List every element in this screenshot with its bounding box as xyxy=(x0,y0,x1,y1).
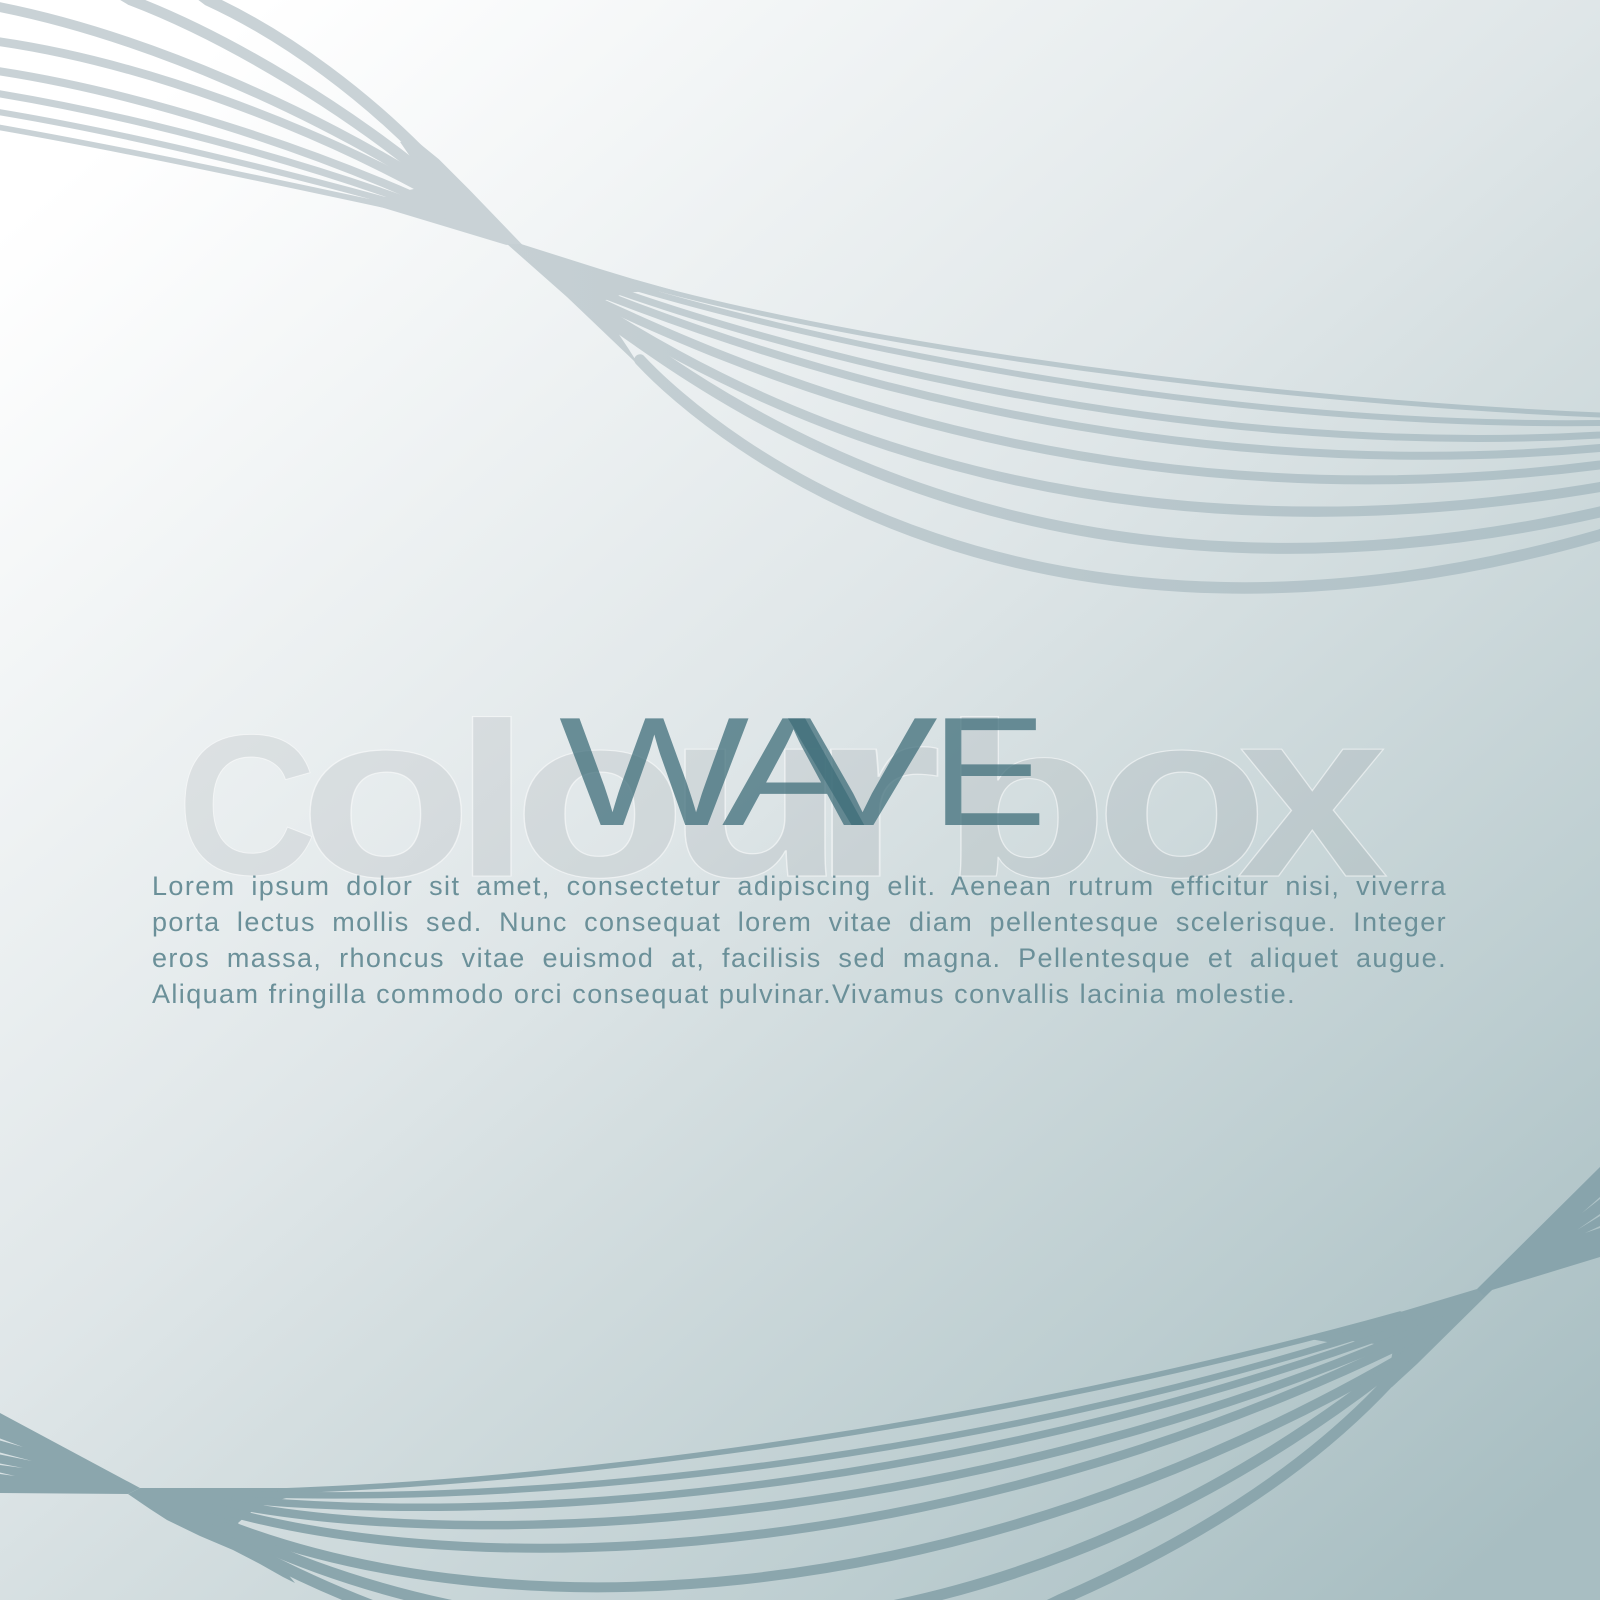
watermark: Colour box: l xyxy=(453,678,531,923)
top wave xyxy=(0,0,1600,588)
body paragraph: eros massa, rhoncus vitae euismod at, facilisis sed magna. Pellentesque et aliquet augue. xyxy=(152,943,1447,973)
watermark: Colour box xyxy=(177,659,1390,928)
watermark: Colour box: u xyxy=(667,659,845,927)
watermark: Colour box: o xyxy=(1095,665,1268,926)
body paragraph: porta lectus mollis sed. Nunc consequat lorem vitae diam pellentesque scelerisque. Integer xyxy=(152,907,1447,937)
watermark: Colour box: o xyxy=(299,665,472,926)
top wave: left strand bundle xyxy=(0,0,522,245)
title: WAVE xyxy=(559,685,1047,859)
title: WAVE: W xyxy=(559,685,750,859)
watermark: Colour box: C xyxy=(177,693,317,917)
top wave: right strand bundle xyxy=(507,244,1600,588)
watermark: Colour box: b xyxy=(942,678,1108,923)
bottom wave: main strand bundle xyxy=(128,1289,1492,1600)
title: WAVE: V xyxy=(787,685,938,859)
body paragraph: Aliquam fringilla commodo orci consequat pulvinar.Vivamus convallis lacinia molestie. xyxy=(152,979,1296,1009)
body paragraph: Lorem ipsum dolor sit amet, consectetur adipiscing elit. Aenean rutrum efficitur nisi, viverra xyxy=(152,871,1447,901)
title: WAVE: A xyxy=(722,685,865,858)
bottom wave: right corner fan xyxy=(1477,1167,1600,1296)
bottom wave: left corner fan xyxy=(0,1413,140,1494)
watermark: Colour box: r xyxy=(808,659,943,928)
body paragraph xyxy=(152,871,1447,1009)
watermark: Colour box: x xyxy=(1237,660,1390,927)
watermark: Colour box: o xyxy=(513,665,686,926)
bottom wave xyxy=(0,1167,1600,1600)
title: WAVE: E xyxy=(931,685,1047,858)
